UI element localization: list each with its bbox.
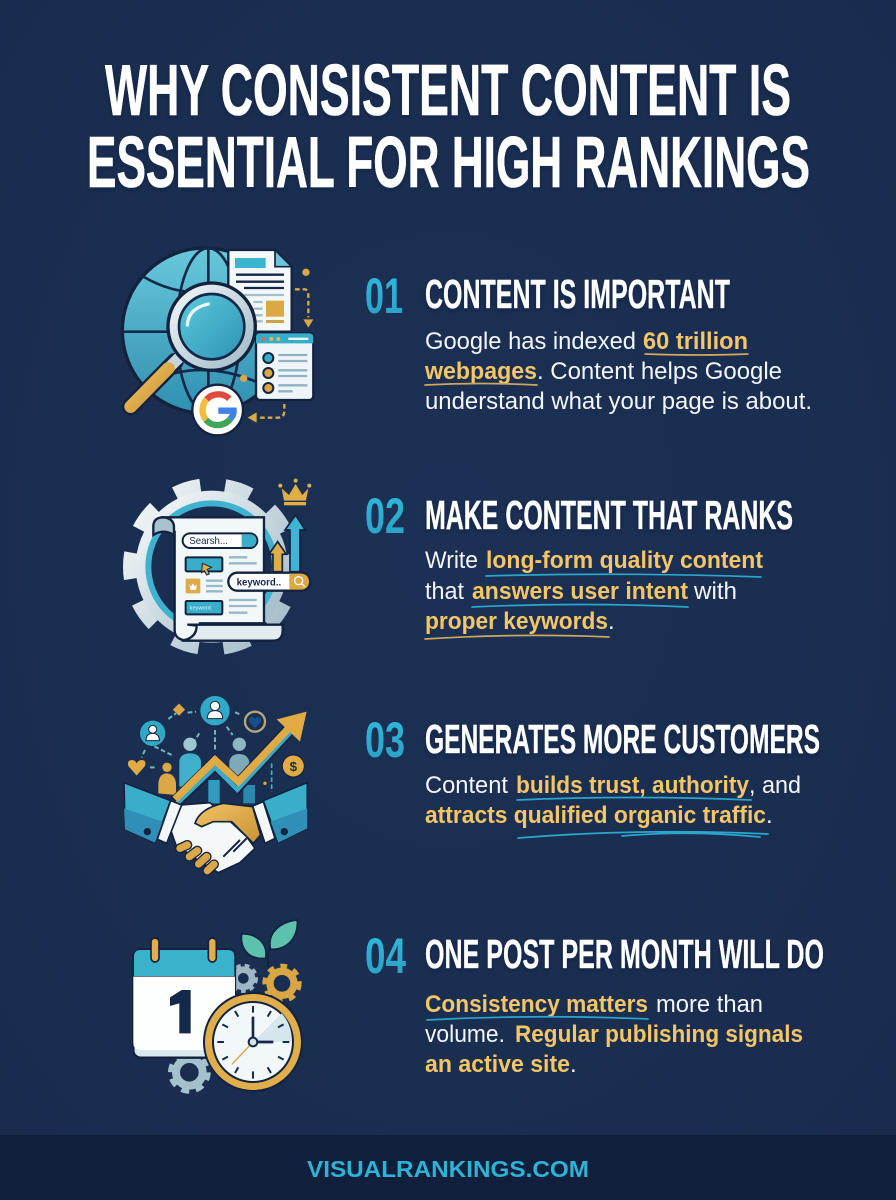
panel: one post per month will do [133, 920, 824, 1092]
text block: generates more customers: attracts qualified organic traffic [425, 802, 766, 829]
title [87, 51, 810, 203]
text block: make content that ranks: that [425, 578, 464, 605]
panel: content is important [122, 248, 812, 435]
text block: content is important: . Content helps Google [537, 358, 782, 385]
icon: gear, scroll, search bars, crown and arrows [120, 475, 311, 658]
text block: make content that ranks: answers user intent [472, 578, 688, 605]
icon: gear, scroll, search bars, crown and arrows: keyword. [190, 606, 213, 612]
icon: gear, scroll, search bars, crown and arrows: Searsh... [189, 536, 228, 547]
text block: content is important: understand what your page is about. [425, 388, 812, 415]
text block: generates more customers: Content [425, 772, 508, 799]
icon: handshake, growth arrow and customers: $ [290, 759, 298, 774]
text block: one post per month will do [425, 991, 803, 1078]
number 02: 02 [365, 488, 405, 544]
text block: make content that ranks: proper keywords [425, 608, 608, 635]
text block: make content that ranks: Write [425, 547, 478, 574]
text block: generates more customers: , and [749, 772, 801, 799]
text block: one post per month will do: . [570, 1051, 577, 1078]
footer bar [0, 1135, 896, 1200]
text block: make content that ranks [425, 547, 763, 639]
text block: make content that ranks: with [693, 578, 737, 605]
text block: content is important: 60 trillion [643, 328, 748, 355]
text block: generates more customers: . [766, 802, 773, 829]
panel: make content that ranks [120, 475, 793, 658]
text block: make content that ranks: . [608, 608, 615, 635]
text block: content is important: webpages [424, 358, 537, 385]
footer website: VISUALRANKINGS.COM [307, 1156, 589, 1182]
text block: one post per month will do: volume. [425, 1021, 505, 1048]
text block: make content that ranks: long-form quality content [486, 547, 763, 574]
text block: one post per month will do: an active site [425, 1051, 570, 1078]
number 04: 04 [365, 928, 406, 984]
text block: generates more customers: builds trust, authority [516, 772, 750, 799]
number 03: 03 [365, 712, 405, 768]
number 01: 01 [365, 268, 403, 324]
text block: generates more customers [425, 772, 801, 838]
icon: gear, scroll, search bars, crown and arrows: keyword.. [237, 577, 282, 588]
icon: calendar, clock, gears and leaves [133, 920, 303, 1092]
panel: generates more customers [124, 696, 820, 873]
text block: one post per month will do: Regular publishing signals [515, 1021, 803, 1048]
text block: one post per month will do: more than [656, 991, 763, 1018]
text block: content is important [424, 328, 812, 415]
text block: content is important: Google has indexed [425, 328, 636, 355]
icon: handshake, growth arrow and customers [124, 696, 307, 873]
icon: globe, magnifier, documents and Google badge [122, 248, 313, 435]
text block: one post per month will do: Consistency matters [425, 991, 648, 1018]
